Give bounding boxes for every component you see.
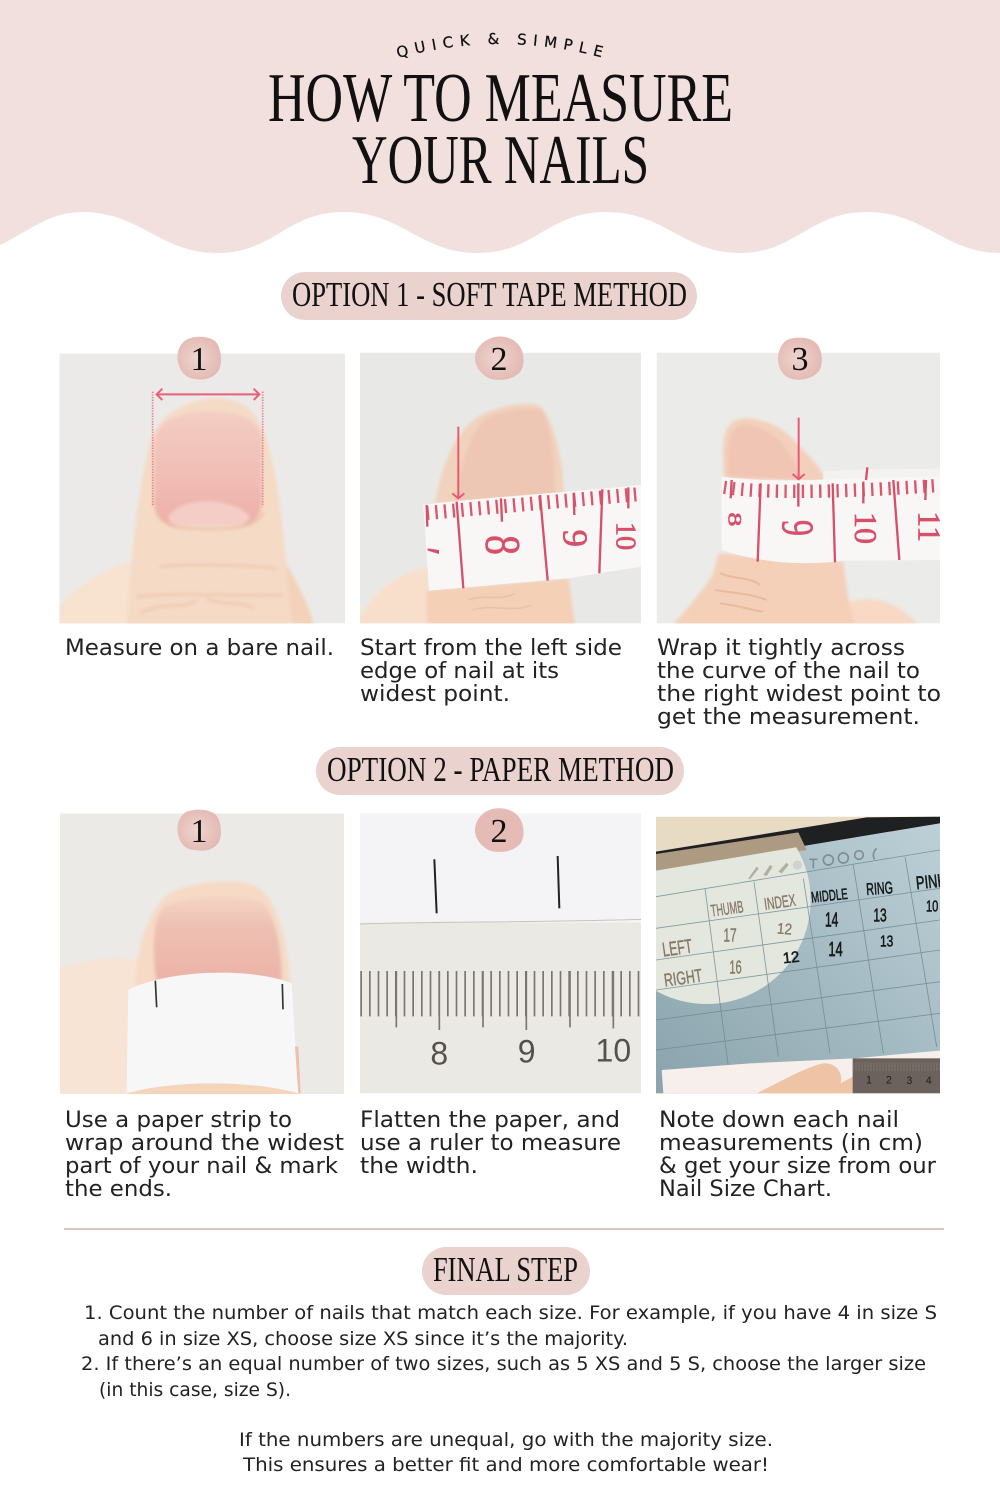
panel: option 2 step 3 photo with handwritten table: 13 [880,933,894,951]
heading: option 1: OPTION 1 - SOFT TAPE METHOD [292,275,687,314]
panel: option 2 step 3 photo with handwritten table: 4 [926,1075,932,1087]
title: HOW TO MEASURE [268,60,733,137]
title [268,60,733,199]
caption: wrap it tightly: get the measurement. [657,705,920,730]
caption: use a paper strip [65,1108,344,1202]
badge: option 1 step 2 [475,337,524,380]
panel: option 1 step 2 photo: 10 [610,522,641,550]
heading: option 2: OPTION 2 - PAPER METHOD [327,750,674,789]
heading: option 2 [316,747,684,795]
closing note: This ensures a better fit and more comfortable wear! [242,1454,769,1476]
panel: option 2 step 3 photo with handwritten table: THUMB [710,898,745,921]
panel: option 2 step 2 photo [360,813,641,1093]
header wave background [0,0,1000,253]
title: YOUR NAILS [352,122,649,199]
panel: option 1 step 3 photo: 11 [911,511,947,542]
panel: option 1 step 3 photo: 9 [772,520,823,536]
numbered instructions [81,1302,937,1401]
badge: option 1 step 1: 1 [190,341,208,378]
caption: start from the left: edge of nail at its [360,659,559,684]
caption: use a paper strip: the ends. [65,1177,172,1202]
panel: option 2 step 3 photo with handwritten table: RIGHT [663,965,704,991]
panel: option 2 step 3 photo with handwritten table: LEFT [661,935,694,961]
caption: use a paper strip: wrap around the widest [65,1131,344,1156]
badge: option 2 step 2: 2 [490,813,508,850]
badge: option 1 step 2: 2 [490,341,508,378]
caption: note down measurements: measurements (in cm) [659,1131,923,1156]
caption: wrap it tightly: the curve of the nail to [657,659,920,684]
panel: option 2 step 3 photo with handwritten table: 14 [825,909,838,931]
panel: option 2 step 2 photo: 8 [430,1035,448,1071]
caption: note down measurements: & get your size from our [659,1154,937,1179]
caption: flatten the paper: the width. [360,1154,478,1179]
caption: measure on a bare nail: Measure on a bare nail. [65,636,334,661]
panel: option 1 step 1 photo [59,353,345,630]
badge: option 1 step 1 [177,337,221,380]
caption: note down measurements: Nail Size Chart. [659,1177,832,1202]
caption: wrap it tightly: the right widest point to [657,682,941,707]
caption: flatten the paper [360,1108,621,1179]
panel: option 1 step 3 photo: 8 [724,512,744,526]
panel: option 2 step 3 photo with handwritten table: 13 [873,905,887,926]
badge: option 1 step 3 [778,338,822,380]
caption: start from the left: Start from the left side [360,636,622,661]
caption: wrap it tightly [657,636,941,730]
numbered instructions: and 6 in size XS, choose size XS since it’s the majority. [98,1328,628,1350]
badge: option 2 step 1 [177,810,221,851]
closing note: If the numbers are unequal, go with the majority size. [239,1429,773,1451]
caption: note down measurements: Note down each nail [659,1108,899,1133]
numbered instructions: 2. If there’s an equal number of two sizes, such as 5 XS and 5 S, choose the larger size [81,1353,926,1375]
caption: use a paper strip: part of your nail & mark [65,1154,338,1179]
heading: option 1 [281,272,697,320]
panel: option 2 step 3 photo with handwritten table [656,816,940,1094]
caption: flatten the paper: Flatten the paper, and [360,1108,620,1133]
panel: option 2 step 3 photo with handwritten table: 16 [729,957,742,978]
panel: option 1 step 2 photo: 9 [555,530,593,547]
panel: option 2 step 3 photo with handwritten table: 12 [782,949,800,967]
panel: option 1 step 3 photo [657,353,947,630]
panel: option 2 step 2 photo: 10 [596,1033,631,1069]
closing note [239,1429,773,1476]
panel: option 2 step 3 photo with handwritten table: 17 [723,925,737,946]
badge: option 1 step 3: 3 [792,341,808,378]
panel: option 2 step 3 photo with handwritten table: 3 [906,1075,912,1087]
panel: option 2 step 3 photo with handwritten table: 1 [866,1074,872,1086]
panel: option 2 step 2 photo: 9 [518,1033,536,1069]
caption: start from the left [360,636,622,707]
badge: option 2 step 2 [475,808,524,852]
panel: option 2 step 3 photo with handwritten table: 14 [828,938,843,960]
numbered instructions: 1. Count the number of nails that match each size. For example, if you have 4 in size S [84,1302,937,1324]
panel: option 2 step 3 photo with handwritten table: 2 [886,1074,892,1086]
caption: flatten the paper: use a ruler to measure [360,1131,621,1156]
panel: option 1 step 3 photo: 10 [848,512,884,544]
eyebrow: quick and simple: QUICK & SIMPLE [397,32,604,58]
panel: option 2 step 3 photo with handwritten table: RING [866,879,894,899]
panel: option 2 step 3 photo with handwritten table: MIDDLE [810,886,849,907]
numbered instructions: (in this case, size S). [99,1379,291,1401]
panel: option 2 step 1 photo [53,813,344,1100]
caption: start from the left: widest point. [360,682,510,707]
caption: note down measurements [659,1108,937,1202]
heading: final step [422,1247,590,1295]
caption: use a paper strip: Use a paper strip to [65,1108,292,1133]
panel: option 2 step 3 photo with handwritten table: 10 [926,898,939,916]
heading: final step: FINAL STEP [433,1250,578,1289]
panel: option 2 step 3 photo with handwritten table: INDEX [763,891,797,914]
badge: option 2 step 1: 1 [190,813,208,850]
panel: option 1 step 2 photo [360,353,641,630]
panel: option 1 step 2 photo: 8 [476,535,531,555]
panel: option 2 step 3 photo with handwritten table: 12 [776,920,793,939]
caption: wrap it tightly: Wrap it tightly across [657,636,905,661]
panel: option 2 step 3 photo with handwritten table: PINK [915,870,947,894]
